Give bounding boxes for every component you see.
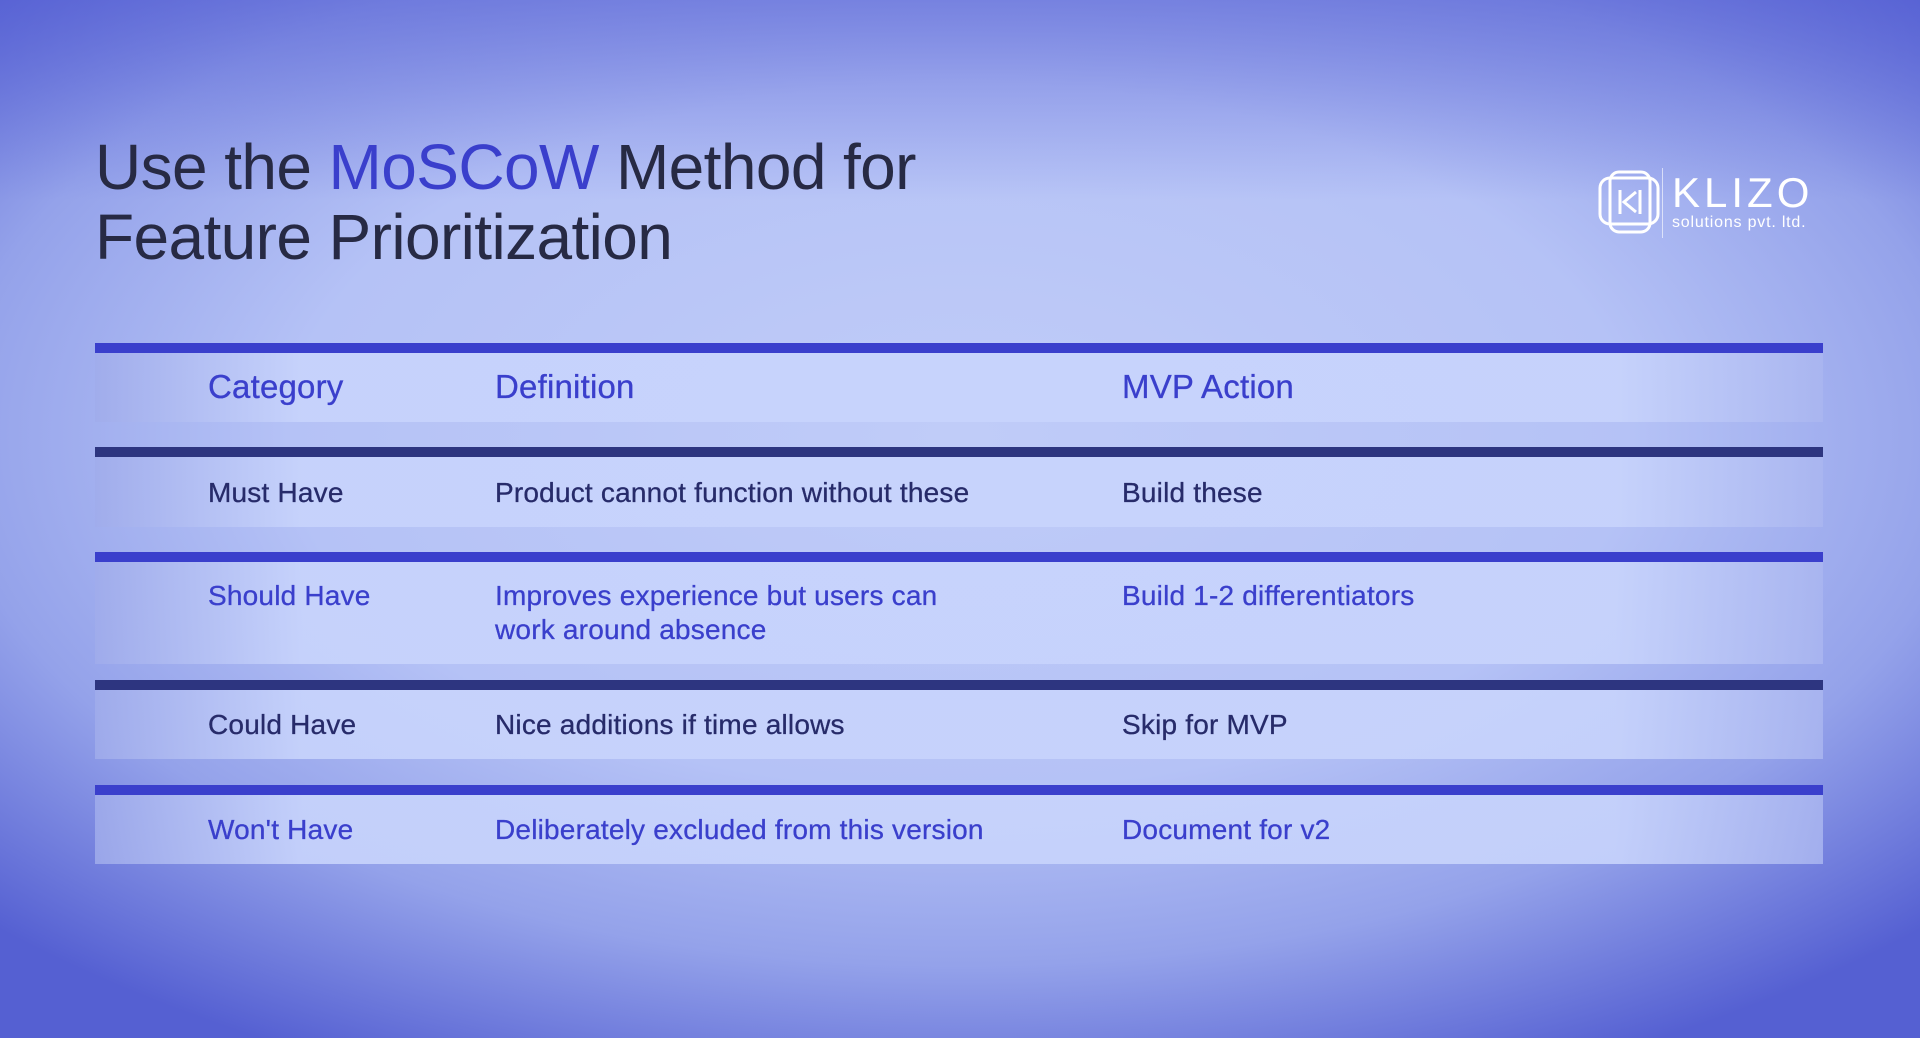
row: could have: Skip for MVP <box>1122 709 1288 740</box>
row: should have: Should Have <box>208 580 371 611</box>
row: should have: Improves experience but users can <box>495 580 937 611</box>
row: should have <box>95 552 1823 664</box>
title: Feature Prioritization <box>95 201 672 273</box>
row: won't have <box>95 785 1823 864</box>
header row: Category <box>208 368 344 405</box>
row: must have: Must Have <box>208 477 344 508</box>
title <box>95 131 916 273</box>
row: won't have: Won't Have <box>208 814 353 845</box>
row: could have: Could Have <box>208 709 356 740</box>
title: Use the MoSCoW Method for <box>95 131 916 203</box>
row: must have <box>95 447 1823 527</box>
row: could have: Nice additions if time allows <box>495 709 845 740</box>
header row: Definition <box>495 368 635 405</box>
row: should have: Build 1-2 differentiators <box>1122 580 1414 611</box>
row: could have <box>95 680 1823 759</box>
logo: KLIZO <box>1672 169 1813 216</box>
logo: solutions pvt. ltd. <box>1672 214 1806 231</box>
row: should have: work around absence <box>495 614 767 645</box>
header row <box>95 343 1823 422</box>
logo <box>1598 168 1813 238</box>
header row: MVP Action <box>1122 368 1294 405</box>
row: must have: Build these <box>1122 477 1263 508</box>
row: won't have: Deliberately excluded from this version <box>495 814 984 845</box>
row: must have: Product cannot function without these <box>495 477 969 508</box>
row: won't have: Document for v2 <box>1122 814 1330 845</box>
